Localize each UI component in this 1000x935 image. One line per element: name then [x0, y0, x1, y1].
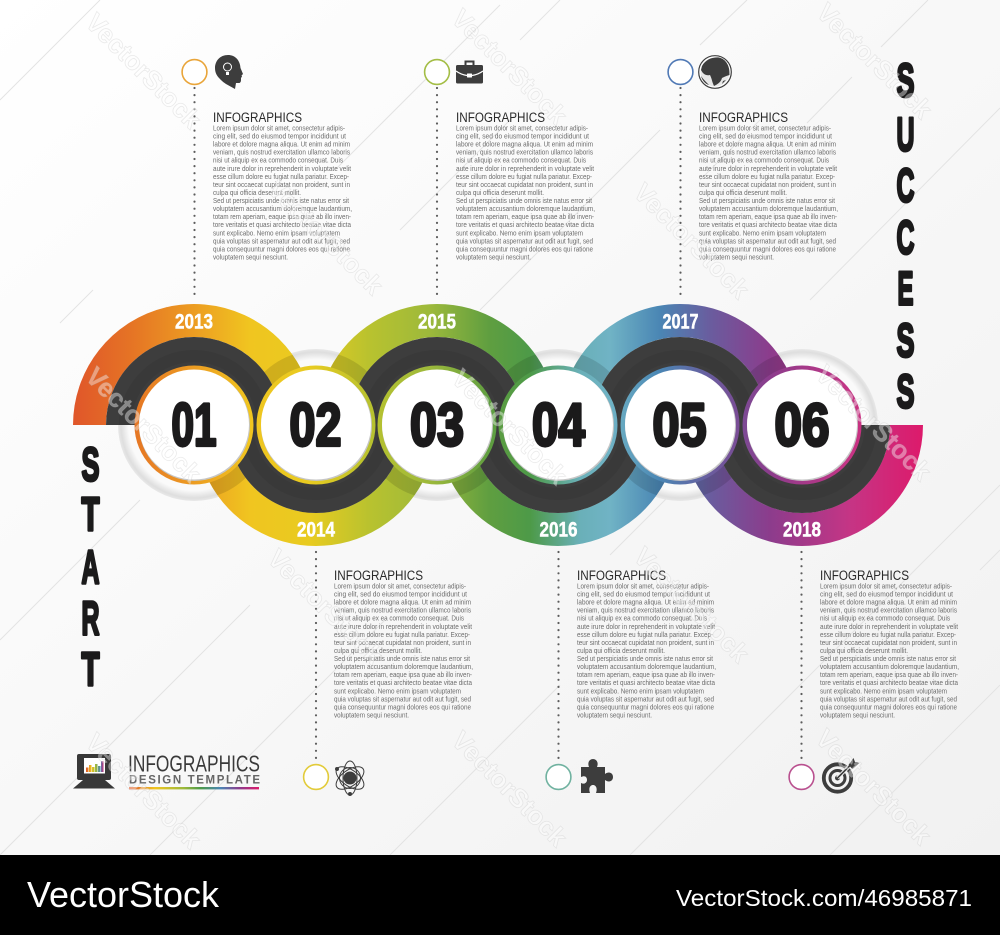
step 03 — [378, 366, 496, 484]
text block: 2018: nisi ut aliquip ex ea commodo consequat. Duis — [820, 614, 950, 623]
year labels: 2018 — [783, 518, 821, 542]
text block: 2017: nisi ut aliquip ex ea commodo consequat. Duis — [699, 156, 829, 165]
text block: 2014: Lorem ipsum dolor sit amet, consectetur adipis- — [334, 582, 467, 590]
text block: 2015: quia voluptas sit aspernatur aut odit aut fugit, sed — [456, 236, 593, 245]
watermark text: VectorStock — [80, 7, 208, 135]
text block: 2015: cing elit, sed do eiusmod tempor incididunt ut — [456, 132, 589, 141]
START label: T — [82, 488, 100, 540]
text block: 2017: quia voluptas sit aspernatur aut odit aut fugit, sed — [699, 236, 836, 245]
text block: 2018: aute irure dolor in reprehenderit in voluptate velit — [820, 622, 958, 631]
step 05 — [620, 366, 740, 484]
text block: 2014 — [334, 568, 473, 720]
text block: 2013: quia consequuntur magni dolores eos qui ratione — [213, 244, 350, 253]
step 01 — [134, 366, 254, 484]
text block: 2018: INFOGRAPHICS — [820, 568, 909, 583]
text block: 2016: Lorem ipsum dolor sit amet, consectetur adipis- — [577, 582, 710, 590]
text block: 2013: veniam, quis nostrud exercitation ullamco laboris — [213, 148, 350, 157]
step 02: 02 — [290, 392, 342, 458]
text block: 2018: tore veritatis et quasi architecto beatae vitae dicta — [820, 678, 958, 687]
text block: 2014: sunt explicabo. Nemo enim ipsam voluptatem — [334, 686, 461, 695]
SUCCESS label: U — [896, 108, 914, 160]
step 01: 01 — [172, 392, 216, 458]
text block: 2014: aute irure dolor in reprehenderit in voluptate velit — [334, 622, 472, 631]
text block: 2013: labore et dolore magna aliqua. Ut enim ad minim — [213, 140, 350, 149]
text block: 2013: aute irure dolor in reprehenderit in voluptate velit — [213, 164, 351, 173]
SUCCESS label: C — [896, 158, 914, 212]
dark inner arcs — [121, 352, 875, 498]
watermark text: VectorStock — [628, 177, 756, 305]
text block: 2015: veniam, quis nostrud exercitation ullamco laboris — [456, 148, 593, 157]
START label: S — [82, 438, 100, 490]
year labels: 2014 — [297, 518, 335, 542]
text block: 2018: totam rem aperiam, eaque ipsa quae ab illo inven- — [820, 670, 959, 679]
logo: infographics design template — [73, 750, 260, 789]
text block: 2014: quia consequuntur magni dolores eos qui ratione — [334, 702, 471, 711]
text block: 2017: quia consequuntur magni dolores eos qui ratione — [699, 244, 836, 253]
text block: 2016: aute irure dolor in reprehenderit in voluptate velit — [577, 622, 715, 631]
text block: 2018: sunt explicabo. Nemo enim ipsam voluptatem — [820, 686, 947, 695]
dark arc inner tone — [125, 356, 871, 494]
text block: 2018: cing elit, sed do eiusmod tempor incididunt ut — [820, 590, 953, 599]
text block: 2016: quia consequuntur magni dolores eos qui ratione — [577, 702, 714, 711]
text block: 2015: labore et dolore magna aliqua. Ut enim ad minim — [456, 140, 593, 149]
step 04 — [498, 366, 618, 484]
text block: 2017: cing elit, sed do eiusmod tempor incididunt ut — [699, 132, 832, 141]
year labels — [175, 310, 821, 542]
text block: 2016: voluptatem accusantium doloremque laudantium, — [577, 662, 716, 671]
rainbow bar — [129, 787, 259, 789]
START label — [82, 438, 100, 696]
text block: 2016: teur sint occaecat cupidatat non proident, sunt in — [577, 638, 714, 647]
text block: 2018: labore et dolore magna aliqua. Ut enim ad minim — [820, 598, 957, 607]
text block: 2014: esse cillum dolore eu fugiat nulla pariatur. Excep- — [334, 630, 471, 639]
text block: 2017 — [699, 110, 838, 262]
arc shading near circles — [210, 354, 786, 496]
icon: target with arrow — [824, 758, 860, 792]
text block: 2016: INFOGRAPHICS — [577, 568, 666, 583]
text block: 2013: voluptatem accusantium doloremque laudantium, — [213, 204, 352, 213]
text block: 2018: quia consequuntur magni dolores eos qui ratione — [820, 702, 957, 711]
text block: 2013: voluptatem sequi nesciunt. — [213, 252, 288, 262]
watermark text — [80, 0, 939, 855]
circle halos — [118, 349, 878, 501]
text block: 2014: quia voluptas sit aspernatur aut odit aut fugit, sed — [334, 694, 471, 703]
step 06 — [742, 366, 862, 484]
text block: 2017: esse cillum dolore eu fugiat nulla pariatur. Excep- — [699, 172, 836, 181]
text block: 2015: INFOGRAPHICS — [456, 110, 545, 125]
START label: R — [82, 592, 100, 644]
icon: globe — [699, 56, 731, 88]
text block: 2016: nisi ut aliquip ex ea commodo consequat. Duis — [577, 614, 707, 623]
text block: 2014: INFOGRAPHICS — [334, 568, 423, 583]
text block: 2016: quia voluptas sit aspernatur aut odit aut fugit, sed — [577, 694, 714, 703]
text block: 2015: tore veritatis et quasi architecto beatae vitae dicta — [456, 220, 594, 229]
year labels: 2015 — [418, 310, 456, 334]
text block: 2013: quia voluptas sit aspernatur aut odit aut fugit, sed — [213, 236, 350, 245]
icon: atom — [332, 761, 368, 796]
text block: 2015: esse cillum dolore eu fugiat nulla pariatur. Excep- — [456, 172, 593, 181]
SUCCESS label — [896, 54, 914, 418]
footer brand: VectorStock — [27, 874, 220, 915]
text block: 2017: Sed ut perspiciatis unde omnis iste natus error sit — [699, 196, 835, 205]
text block: 2015: aute irure dolor in reprehenderit in voluptate velit — [456, 164, 594, 173]
step 06: 06 — [774, 392, 830, 458]
SUCCESS label: S — [896, 314, 914, 366]
coloured arcs — [90, 321, 906, 529]
text block: 2016: cing elit, sed do eiusmod tempor incididunt ut — [577, 590, 710, 599]
watermark text: VectorStock — [262, 543, 390, 671]
watermark text: VectorStock — [446, 725, 574, 853]
text block: 2018: esse cillum dolore eu fugiat nulla pariatur. Excep- — [820, 630, 957, 639]
text block: 2018: voluptatem sequi nesciunt. — [820, 710, 895, 720]
text block: 2017: INFOGRAPHICS — [699, 110, 788, 125]
watermark text: VectorStock — [810, 359, 938, 487]
text block: 2017: veniam, quis nostrud exercitation ullamco laboris — [699, 148, 836, 157]
icon: head with lightbulb — [215, 55, 243, 89]
text block: 2013: esse cillum dolore eu fugiat nulla pariatur. Excep- — [213, 172, 350, 181]
watermark text: VectorStock — [446, 363, 574, 491]
logo subtitle: DESIGN TEMPLATE — [129, 774, 260, 786]
marker circles — [182, 60, 814, 789]
text block: 2017: sunt explicabo. Nemo enim ipsam voluptatem — [699, 228, 826, 237]
text block: 2015: voluptatem accusantium doloremque laudantium, — [456, 204, 595, 213]
text block: 2016: esse cillum dolore eu fugiat nulla pariatur. Excep- — [577, 630, 714, 639]
icon: computer monitor — [73, 754, 115, 788]
text block: 2014: veniam, quis nostrud exercitation ullamco laboris — [334, 606, 471, 615]
step 02 — [256, 366, 376, 484]
text block: 2015 — [456, 110, 595, 262]
text block: 2013: tore veritatis et quasi architecto beatae vitae dicta — [213, 220, 351, 229]
text block: 2017: culpa qui officia deserunt mollit. — [699, 188, 787, 197]
SUCCESS label: S — [896, 364, 914, 418]
text block: 2018 — [820, 568, 959, 720]
logo title: INFOGRAPHICS — [128, 750, 260, 776]
text block: 2017: voluptatem sequi nesciunt. — [699, 252, 774, 262]
text block: 2014: Sed ut perspiciatis unde omnis iste natus error sit — [334, 654, 470, 663]
watermark text: VectorStock — [80, 727, 208, 855]
watermark text: VectorStock — [262, 173, 390, 301]
text block: 2016: culpa qui officia deserunt mollit. — [577, 646, 665, 655]
text block: 2013: cing elit, sed do eiusmod tempor incididunt ut — [213, 132, 346, 141]
text block: 2014: teur sint occaecat cupidatat non proident, sunt in — [334, 638, 471, 647]
text block: 2017: aute irure dolor in reprehenderit in voluptate velit — [699, 164, 837, 173]
watermark text: VectorStock — [628, 541, 756, 669]
text block: 2017: teur sint occaecat cupidatat non proident, sunt in — [699, 180, 836, 189]
text block: 2018: Lorem ipsum dolor sit amet, consectetur adipis- — [820, 582, 953, 590]
watermark text: VectorStock — [810, 723, 938, 851]
text block: 2013: teur sint occaecat cupidatat non proident, sunt in — [213, 180, 350, 189]
text block: 2014: culpa qui officia deserunt mollit. — [334, 646, 422, 655]
text block: 2014: nisi ut aliquip ex ea commodo consequat. Duis — [334, 614, 464, 623]
SUCCESS label: E — [898, 262, 914, 314]
step 03: 03 — [410, 392, 464, 458]
text block: 2018: quia voluptas sit aspernatur aut odit aut fugit, sed — [820, 694, 957, 703]
text block: 2017: tore veritatis et quasi architecto beatae vitae dicta — [699, 220, 837, 229]
text block: 2015: teur sint occaecat cupidatat non proident, sunt in — [456, 180, 593, 189]
text block: 2016: totam rem aperiam, eaque ipsa quae ab illo inven- — [577, 670, 716, 679]
text block: 2018: voluptatem accusantium doloremque laudantium, — [820, 662, 959, 671]
year labels: 2013 — [175, 310, 213, 334]
text block: 2016: labore et dolore magna aliqua. Ut enim ad minim — [577, 598, 714, 607]
watermark text: VectorStock — [80, 361, 208, 489]
text block: 2015: Lorem ipsum dolor sit amet, consectetur adipis- — [456, 124, 589, 132]
text block: 2014: labore et dolore magna aliqua. Ut enim ad minim — [334, 598, 471, 607]
text block: 2014: totam rem aperiam, eaque ipsa quae ab illo inven- — [334, 670, 473, 679]
text block: 2017: totam rem aperiam, eaque ipsa quae ab illo inven- — [699, 212, 838, 221]
text block: 2015: quia consequuntur magni dolores eos qui ratione — [456, 244, 593, 253]
text block: 2017: labore et dolore magna aliqua. Ut enim ad minim — [699, 140, 836, 149]
text block: 2013: Sed ut perspiciatis unde omnis iste natus error sit — [213, 196, 349, 205]
text block: 2015: nisi ut aliquip ex ea commodo consequat. Duis — [456, 156, 586, 165]
text block: 2018: Sed ut perspiciatis unde omnis iste natus error sit — [820, 654, 956, 663]
text block: 2018: culpa qui officia deserunt mollit. — [820, 646, 908, 655]
step 04: 04 — [532, 392, 585, 458]
text block: 2017: Lorem ipsum dolor sit amet, consectetur adipis- — [699, 124, 832, 132]
text block: 2014: voluptatem accusantium doloremque laudantium, — [334, 662, 473, 671]
icon: puzzle piece — [581, 759, 613, 793]
SUCCESS label: C — [896, 210, 914, 264]
footer band — [0, 855, 1000, 935]
text block: 2013: totam rem aperiam, eaque ipsa quae ab illo inven- — [213, 212, 352, 221]
START label: T — [82, 642, 100, 696]
year labels: 2016 — [540, 518, 578, 542]
watermark text: VectorStock — [811, 0, 939, 125]
text block: 2018: veniam, quis nostrud exercitation ullamco laboris — [820, 606, 957, 615]
text block: 2013: culpa qui officia deserunt mollit. — [213, 188, 301, 197]
text block: 2016: veniam, quis nostrud exercitation ullamco laboris — [577, 606, 714, 615]
text block: 2014: tore veritatis et quasi architecto beatae vitae dicta — [334, 678, 472, 687]
START label: A — [82, 540, 100, 594]
text block: 2016 — [577, 568, 716, 720]
text block: 2016: sunt explicabo. Nemo enim ipsam voluptatem — [577, 686, 704, 695]
text block: 2015: voluptatem sequi nesciunt. — [456, 252, 531, 262]
year labels: 2017 — [662, 310, 698, 334]
timeline ribbon — [90, 310, 906, 542]
text block: 2016: Sed ut perspiciatis unde omnis iste natus error sit — [577, 654, 713, 663]
footer url: VectorStock.com/46985871 — [676, 885, 972, 911]
text block: 2016: voluptatem sequi nesciunt. — [577, 710, 652, 720]
text block: 2016: tore veritatis et quasi architecto beatae vitae dicta — [577, 678, 715, 687]
text block: 2015: Sed ut perspiciatis unde omnis iste natus error sit — [456, 196, 592, 205]
text block: 2014: voluptatem sequi nesciunt. — [334, 710, 409, 720]
text block: 2017: voluptatem accusantium doloremque laudantium, — [699, 204, 838, 213]
text block: 2013: nisi ut aliquip ex ea commodo consequat. Duis — [213, 156, 343, 165]
text block: 2013: INFOGRAPHICS — [213, 110, 302, 125]
text block: 2018: teur sint occaecat cupidatat non proident, sunt in — [820, 638, 957, 647]
SUCCESS label: S — [896, 54, 914, 106]
text block: 2013: Lorem ipsum dolor sit amet, consectetur adipis- — [213, 124, 346, 132]
icon: briefcase — [456, 62, 483, 84]
text block: 2013: sunt explicabo. Nemo enim ipsam voluptatem — [213, 228, 340, 237]
text block: 2015: totam rem aperiam, eaque ipsa quae ab illo inven- — [456, 212, 595, 221]
dotted connector lines — [194, 88, 802, 762]
watermark text: VectorStock — [446, 3, 574, 131]
text block: 2015: sunt explicabo. Nemo enim ipsam voluptatem — [456, 228, 583, 237]
text block: 2015: culpa qui officia deserunt mollit. — [456, 188, 544, 197]
text block: 2014: cing elit, sed do eiusmod tempor incididunt ut — [334, 590, 467, 599]
step 05: 05 — [652, 392, 706, 458]
text block: 2013 — [213, 110, 352, 262]
